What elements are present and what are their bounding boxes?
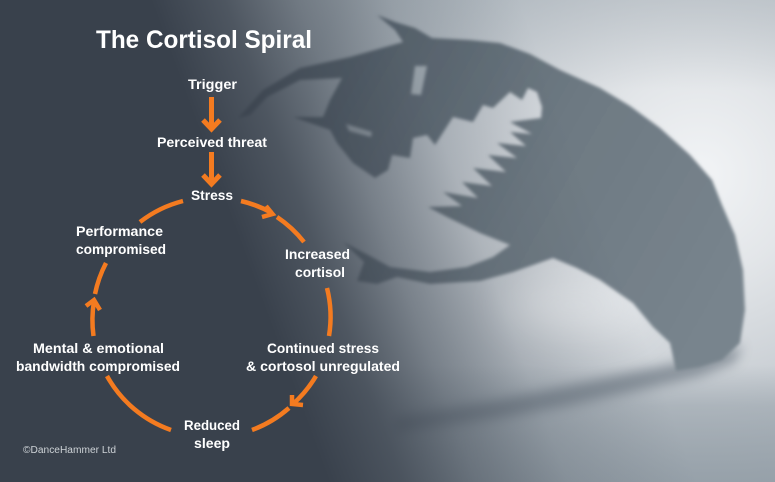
arc: sleep to mental bandwidth [107,376,171,430]
label: performance compromised [76,224,166,257]
label: continued stress: Continued stress [267,341,379,356]
label: continued stress [246,341,400,374]
label: stress: Stress [191,188,233,203]
label: performance compromised: Performance [76,224,164,239]
arc: cortisol to continued stress [327,288,331,336]
label: mental and emotional bandwidth: bandwidth compromised [16,359,180,374]
label: performance compromised: compromised [76,242,166,257]
label: mental and emotional bandwidth: Mental & emotional [33,341,164,356]
title: The Cortisol Spiral [96,26,312,54]
arc: into performance [95,263,106,294]
label: trigger: Trigger [188,77,238,92]
label: continued stress: & cortosol unregulated [246,359,400,374]
label: reduced sleep: Reduced [184,418,240,433]
label: increased cortisol: Increased [285,247,350,262]
arrow: continued stress to sleep [292,376,316,405]
cycle arrows [86,201,331,430]
label: increased cortisol [285,247,350,280]
label: increased cortisol: cortisol [295,265,345,280]
monster shadow [238,15,745,432]
arc: into reduced sleep [252,408,289,430]
arrow: trigger to perceived threat [203,97,220,129]
arrow: stress to increased cortisol [241,201,272,217]
label: perceived threat: Perceived threat [157,135,268,150]
label: mental and emotional bandwidth [16,341,180,374]
label: reduced sleep [184,418,240,451]
step labels [16,77,400,451]
arrow: perceived threat to stress [203,152,220,184]
copyright: ©DanceHammer Ltd [23,445,116,456]
arrow: mental bandwidth to performance [86,300,100,336]
eye slits [346,66,427,137]
arc: into increased cortisol [277,217,304,242]
label: reduced sleep: sleep [194,436,230,451]
arc: performance to stress [140,201,183,222]
